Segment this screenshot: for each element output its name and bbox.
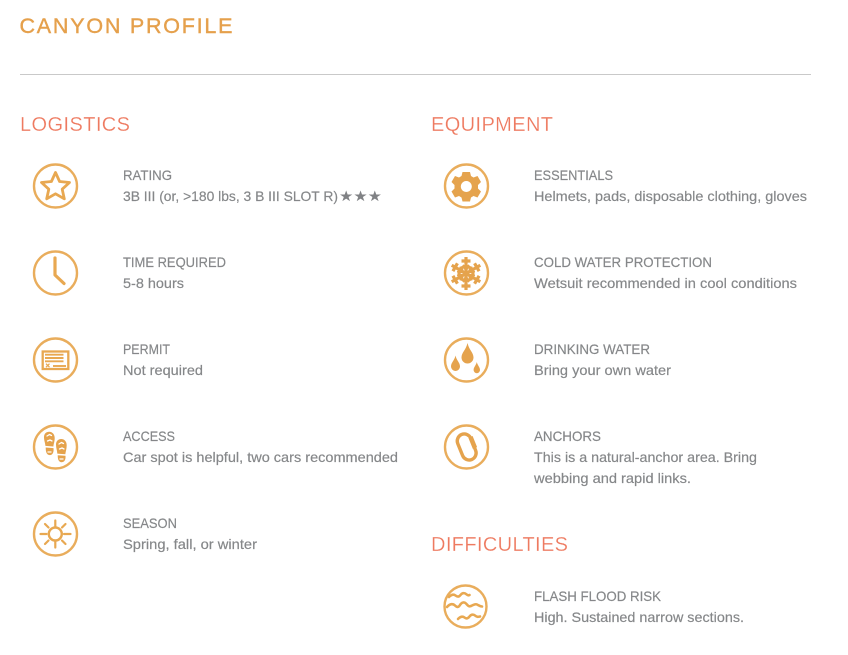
drinking water text: Bring your own water — [534, 362, 671, 378]
anchors text: This is a natural-anchor area. Bring — [534, 449, 757, 465]
essentials text: Helmets, pads, disposable clothing, gloves — [534, 188, 807, 204]
access text: Car spot is helpful, two cars recommended — [123, 449, 398, 465]
flash flood risk text — [534, 588, 744, 625]
heading: equipment: EQUIPMENT — [431, 114, 553, 136]
row: access — [34, 426, 398, 468]
icon: water drops — [445, 338, 488, 382]
heading: difficulties: DIFFICULTIES — [431, 534, 568, 556]
cold water protection text — [534, 254, 797, 291]
icon: footprints — [34, 426, 77, 468]
row: time required — [34, 252, 226, 294]
icon: sun — [34, 512, 77, 556]
row: drinking water — [445, 338, 671, 382]
cold water protection text: Wetsuit recommended in cool conditions — [534, 275, 797, 291]
access text — [123, 428, 398, 465]
permit text: PERMIT — [123, 341, 170, 357]
access text: ACCESS — [123, 428, 175, 444]
rating text: RATING — [123, 167, 172, 183]
time required text: TIME REQUIRED — [123, 254, 226, 270]
icon: clock — [34, 252, 77, 294]
row: anchors — [445, 426, 757, 486]
row: essentials — [445, 164, 807, 208]
season text: SEASON — [123, 515, 177, 531]
row: cold water protection — [445, 252, 797, 294]
icon: snowflake — [445, 252, 488, 294]
panel: equipment — [431, 114, 807, 486]
icon: permit card — [34, 338, 77, 382]
flash flood risk text: FLASH FLOOD RISK — [534, 588, 662, 604]
icon: waves — [444, 586, 486, 628]
season text — [123, 515, 257, 552]
essentials text — [534, 167, 807, 204]
flash flood risk text: High. Sustained narrow sections. — [534, 609, 744, 625]
permit text — [123, 341, 203, 378]
time required text: 5-8 hours — [123, 275, 184, 291]
rating text: ★★★ — [339, 189, 382, 205]
time required text — [123, 254, 226, 291]
panel: logistics — [20, 114, 398, 556]
icon: star — [34, 164, 77, 208]
season text: Spring, fall, or winter — [123, 536, 257, 552]
anchors text — [533, 428, 757, 486]
icon: carabiner — [445, 426, 488, 468]
icon: gear — [445, 164, 488, 208]
rating text — [123, 167, 382, 205]
essentials text: ESSENTIALS — [534, 167, 613, 183]
row: season — [34, 512, 257, 556]
panel: difficulties — [431, 534, 744, 628]
heading: logistics: LOGISTICS — [20, 114, 130, 136]
permit text: Not required — [123, 362, 203, 378]
drinking water text — [534, 341, 671, 378]
row: rating — [34, 164, 382, 208]
drinking water text: DRINKING WATER — [534, 341, 650, 357]
row: permit — [34, 338, 203, 382]
row: flash flood risk — [444, 586, 744, 628]
rating text: 3B III (or, >180 lbs, 3 B III SLOT R) — [123, 188, 338, 204]
anchors text: ANCHORS — [534, 428, 601, 444]
anchors text: webbing and rapid links. — [533, 470, 691, 486]
cold water protection text: COLD WATER PROTECTION — [534, 254, 712, 270]
title: CANYON PROFILE — [20, 14, 232, 38]
